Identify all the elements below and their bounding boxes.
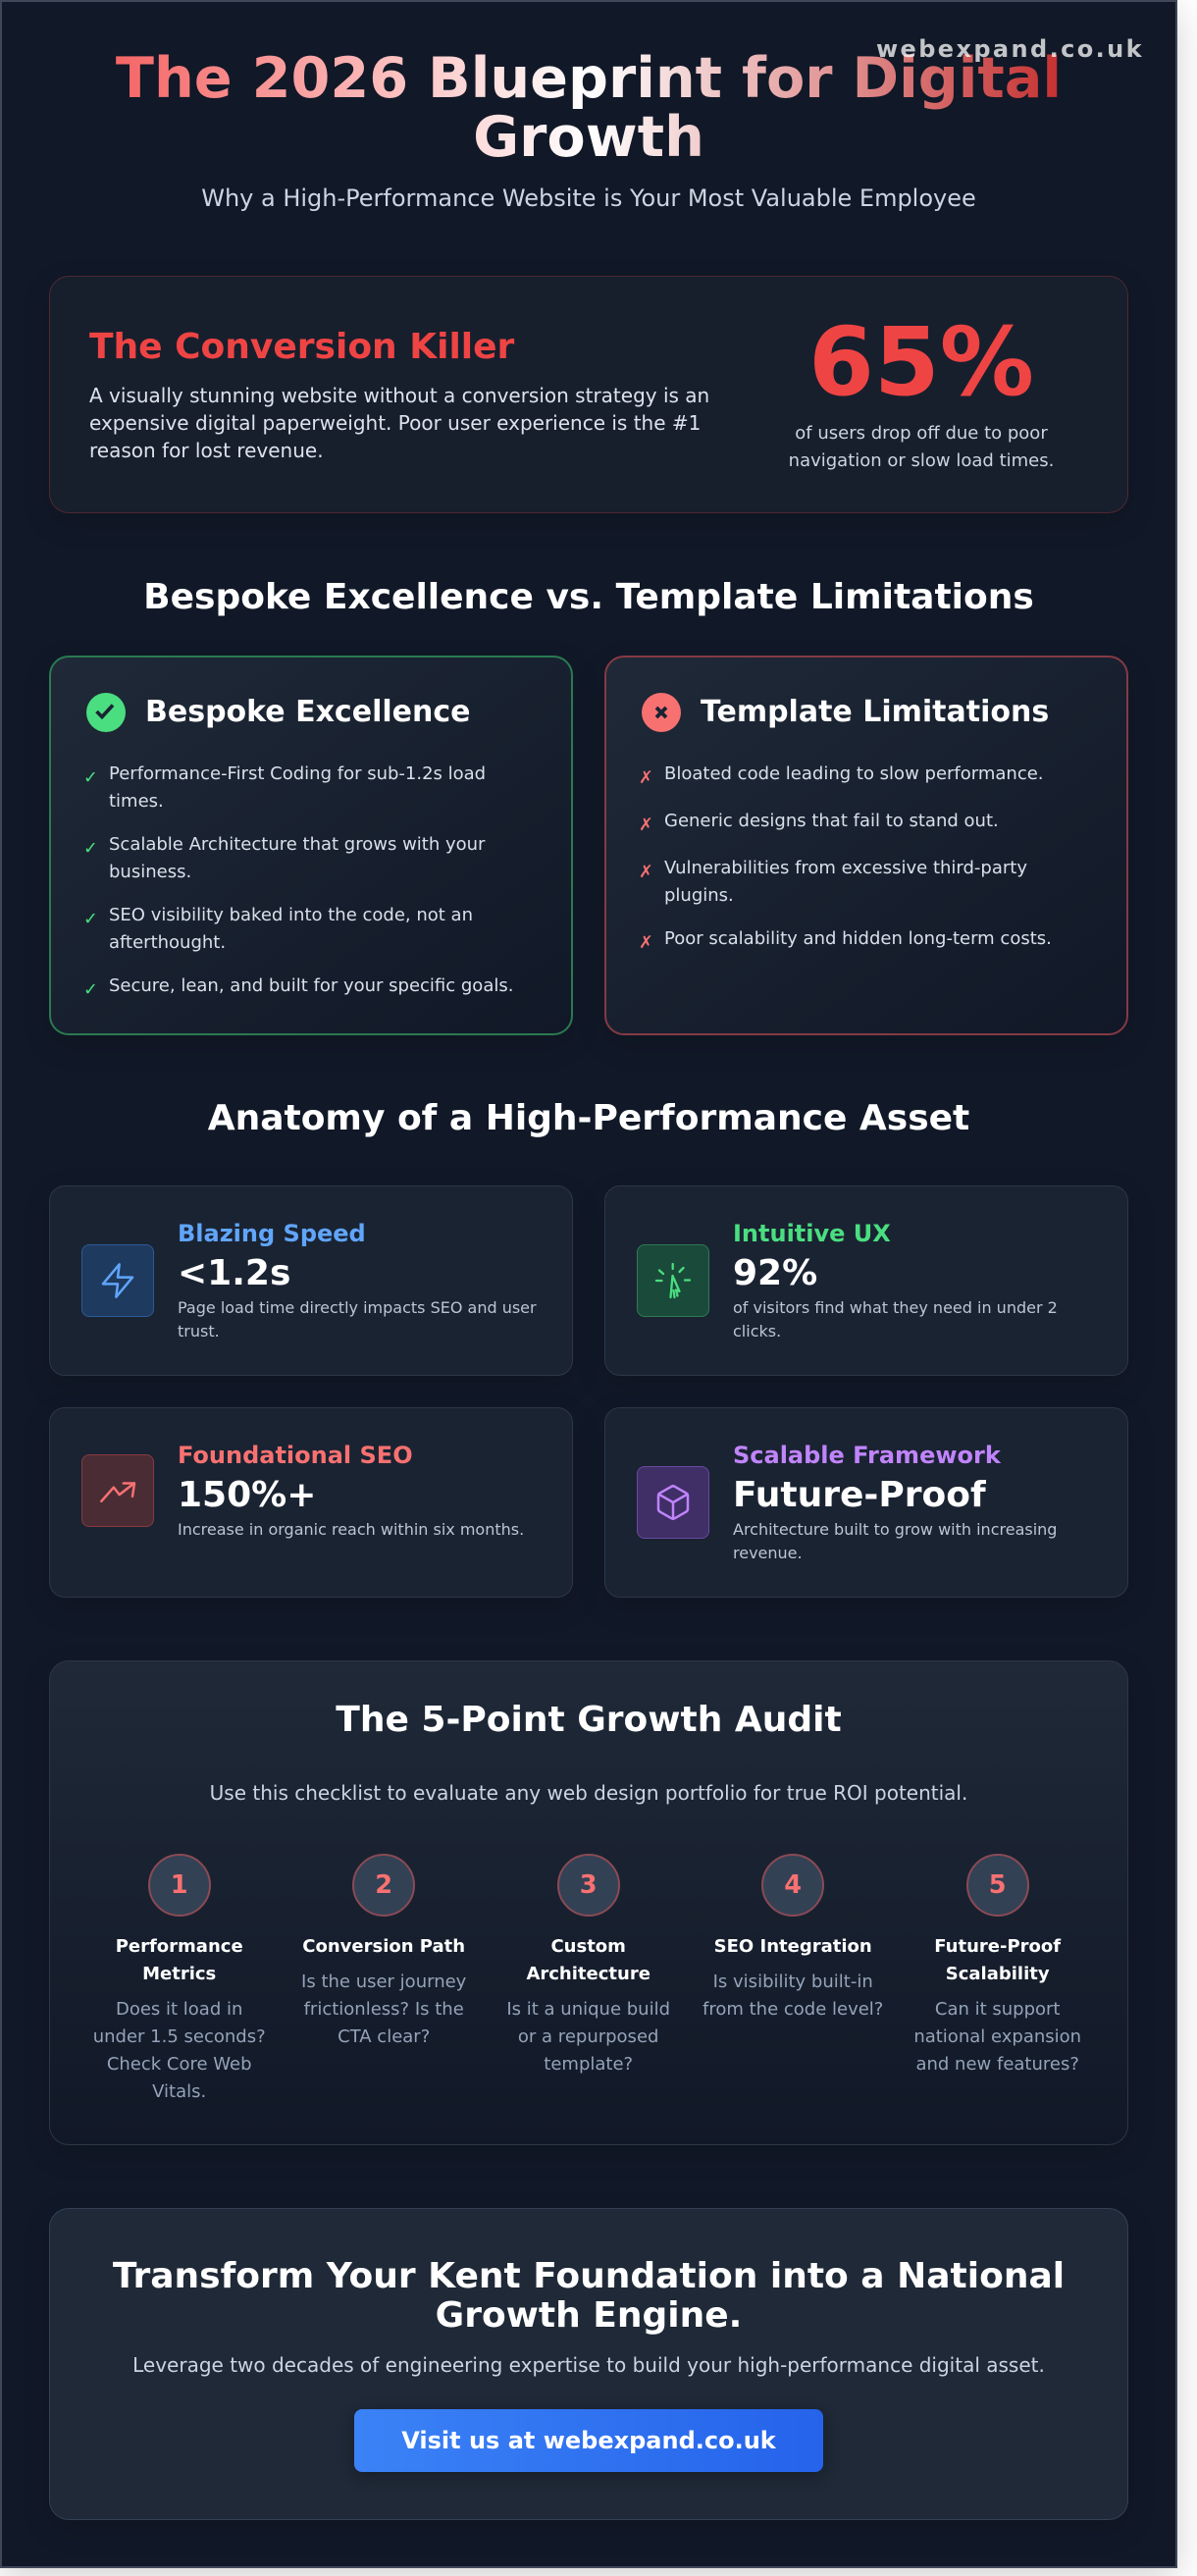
list item: ✓: [83, 839, 98, 859]
heading: comparison section: Bespoke Excellence vs. Template Limitations: [143, 577, 1034, 616]
list: template drawbacks: [639, 763, 1052, 953]
list item: SEO visibility baked into the code, not an: [109, 905, 473, 925]
step description: from the code level?: [703, 1999, 883, 2020]
description: clicks.: [733, 1322, 781, 1341]
step description: or a repurposed: [518, 2026, 658, 2047]
intro text: Use this checklist to evaluate any web design portfolio for true ROI potential.: [210, 1781, 967, 1805]
step description: CTA clear?: [338, 2026, 430, 2047]
brand watermark: webexpand.co.uk: [876, 35, 1144, 63]
label: Blazing Speed: [178, 1220, 366, 1247]
audit step 5: [913, 1854, 1081, 2075]
list: bespoke benefits: [83, 763, 513, 1000]
step description: Can it support: [935, 1999, 1060, 2020]
step title: Architecture: [526, 1964, 651, 1984]
step title: Performance: [116, 1936, 243, 1957]
step title: [934, 1936, 1062, 1984]
step description: [93, 1999, 266, 2102]
list item: business.: [109, 862, 191, 882]
description: trust.: [178, 1322, 220, 1341]
card: scalable framework: [604, 1407, 1128, 1598]
list item: ✗: [639, 933, 653, 953]
description: Page load time directly impacts SEO and user: [178, 1298, 537, 1317]
step number: [761, 1854, 824, 1917]
title: [115, 49, 1063, 167]
list item: [83, 834, 485, 882]
text: conversion killer description: reason for lost revenue.: [89, 439, 324, 462]
list item: [639, 858, 1027, 906]
step description: [506, 1999, 670, 2075]
step number: [352, 1854, 415, 1917]
step title: SEO Integration: [714, 1936, 872, 1957]
text: conversion killer description: expensive digital paperweight. Poor user experience is the #1: [89, 411, 701, 435]
card: foundational seo: [49, 1407, 573, 1598]
heading: growth audit: The 5-Point Growth Audit: [336, 1700, 842, 1740]
audit step 3: [506, 1854, 670, 2075]
step description: [703, 1971, 883, 2020]
step title: Scalability: [946, 1964, 1050, 1984]
heading: bespoke excellence: Bespoke Excellence: [145, 695, 470, 729]
value: Future-Proof: [733, 1475, 986, 1515]
step description: [913, 1999, 1081, 2075]
list item: times.: [109, 791, 164, 812]
description: Architecture built to grow with increasing: [733, 1520, 1057, 1539]
icon: cube: [637, 1466, 709, 1539]
text: conversion killer description: [89, 384, 709, 462]
step description: frictionless? Is the: [304, 1999, 464, 2020]
step description: Check Core Web: [107, 2054, 252, 2075]
list item: ✗: [639, 863, 653, 882]
label: Scalable Framework: [733, 1442, 1001, 1469]
list item: ✓: [83, 980, 98, 1000]
text: call to action: Leverage two decades of engineering expertise to build your high-performance digital asset.: [132, 2353, 1045, 2377]
list item: afterthought.: [109, 932, 226, 953]
description: Increase in organic reach within six months.: [178, 1520, 524, 1539]
list item: Poor scalability and hidden long-term costs.: [664, 928, 1052, 949]
list item: Generic designs that fail to stand out.: [664, 811, 999, 831]
list item: Scalable Architecture that grows with your: [109, 834, 485, 855]
heading: call to action: [113, 2256, 1065, 2336]
step number: 3: [580, 1870, 598, 1900]
step description: Vitals.: [152, 2081, 206, 2102]
icon: pointer click: [637, 1244, 709, 1317]
value: <1.2s: [178, 1253, 290, 1293]
panel: the conversion killer: [49, 276, 1128, 513]
button: Visit us at webexpand.co.uk: [401, 2427, 776, 2454]
step title: Future-Proof: [934, 1936, 1061, 1957]
card: intuitive ux: [604, 1185, 1128, 1376]
step description: Does it load in: [116, 1999, 242, 2020]
step number: [148, 1854, 211, 1917]
title: Growth: [473, 104, 704, 170]
step description: national expansion: [913, 2026, 1081, 2047]
value: 92%: [733, 1253, 817, 1293]
heading: call to action: Growth Engine.: [436, 2295, 742, 2336]
subtitle: Why a High-Performance Website is Your Most Valuable Employee: [201, 184, 976, 212]
list item: ✗: [639, 815, 653, 835]
list item: [83, 905, 473, 953]
description: [733, 1520, 1057, 1562]
stat caption: navigation or slow load times.: [789, 450, 1054, 471]
value: 150%+: [178, 1475, 316, 1515]
description: revenue.: [733, 1544, 803, 1562]
step number: [557, 1854, 620, 1917]
audit step 2: [301, 1854, 466, 2047]
step description: and new features?: [915, 2054, 1079, 2075]
description: of visitors find what they need in under 2: [733, 1298, 1058, 1317]
step description: under 1.5 seconds?: [93, 2026, 266, 2047]
panel: bespoke excellence: [49, 656, 573, 1035]
description: [178, 1298, 537, 1341]
card: blazing speed: [49, 1185, 573, 1376]
list item: ✓: [83, 910, 98, 929]
step description: Is the user journey: [301, 1971, 466, 1992]
step title: [526, 1936, 651, 1984]
list item: Vulnerabilities from excessive third-party: [664, 858, 1027, 878]
step number: 1: [171, 1870, 188, 1900]
stat caption: of users drop off due to poor: [795, 423, 1048, 444]
step description: template?: [544, 2054, 633, 2075]
list item: Secure, lean, and built for your specific goals.: [109, 975, 513, 996]
list item: ✗: [639, 768, 653, 788]
list item: plugins.: [664, 885, 734, 906]
step number: 2: [375, 1870, 392, 1900]
text: conversion killer description: A visually stunning website without a conversion strategy is an: [89, 384, 709, 407]
button: [354, 2409, 823, 2472]
step number: [966, 1854, 1029, 1917]
step number: 5: [989, 1870, 1007, 1900]
list item: Bloated code leading to slow performance.: [664, 763, 1044, 784]
step description: [301, 1971, 466, 2047]
icon: red cross: [642, 693, 681, 732]
icon: lightning bolt: [81, 1244, 154, 1317]
audit step 4: [703, 1854, 883, 2020]
step description: Is visibility built-in: [713, 1971, 873, 1992]
step number: 4: [784, 1870, 802, 1900]
heading: conversion killer: The Conversion Killer: [89, 327, 514, 367]
title: The 2026 Blueprint for Digital: [116, 45, 1062, 111]
step title: Custom: [550, 1936, 626, 1957]
audit step 1: [93, 1854, 266, 2102]
panel: 5-point growth audit: [49, 1660, 1128, 2145]
label: Intuitive UX: [733, 1220, 891, 1247]
list item: ✓: [83, 768, 98, 788]
stat: 65 percent: 65%: [808, 307, 1034, 417]
list item: [83, 763, 486, 812]
icon: green check: [86, 693, 126, 732]
step title: Metrics: [142, 1964, 216, 1984]
panel: call to action: [49, 2208, 1128, 2520]
panel: template limitations: [604, 656, 1128, 1035]
heading: template limitations: Template Limitations: [701, 695, 1049, 729]
label: Foundational SEO: [178, 1442, 413, 1469]
heading: anatomy section: Anatomy of a High-Performance Asset: [208, 1098, 969, 1138]
step description: Is it a unique build: [506, 1999, 670, 2020]
stat caption: [789, 423, 1054, 471]
list item: Performance-First Coding for sub-1.2s load: [109, 763, 486, 784]
description: [733, 1298, 1058, 1341]
step title: Conversion Path: [302, 1936, 465, 1957]
step title: [116, 1936, 243, 1984]
icon: trending up: [81, 1454, 154, 1527]
heading: call to action: Transform Your Kent Foundation into a National: [113, 2256, 1065, 2296]
